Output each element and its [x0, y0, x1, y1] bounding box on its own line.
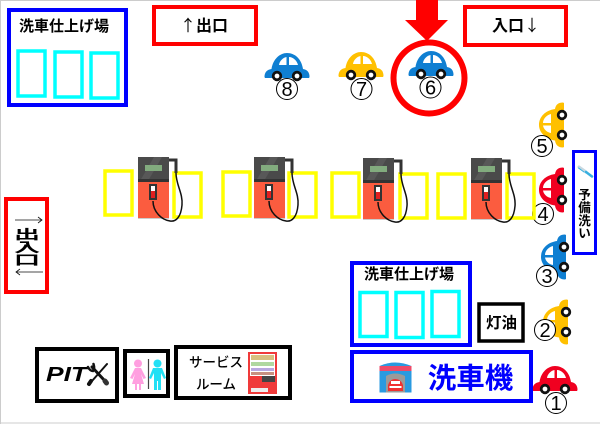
car 3 — [536, 234, 568, 288]
sign: entrance: 入口↓ — [492, 12, 540, 36]
sign: exit left: 入 — [14, 241, 41, 255]
car 6 — [408, 51, 454, 100]
panel: pit: PIT — [46, 364, 89, 386]
icon: woman — [130, 360, 146, 390]
car 2: 2 — [539, 320, 551, 342]
fuel pump 3 — [363, 158, 407, 222]
car 1 — [532, 366, 578, 415]
highlight circle — [394, 42, 464, 114]
finishing bays — [360, 292, 459, 338]
car 3: 3 — [541, 266, 553, 288]
pre-wash label: い — [578, 226, 591, 240]
heading: finishing area: 洗車仕上げ場 — [364, 265, 454, 283]
pre-wash label — [578, 188, 591, 240]
arrow: red down arrow — [405, 0, 448, 41]
car wash label: 洗車機 — [428, 363, 514, 395]
fuel lanes — [105, 171, 534, 218]
car 1: 1 — [550, 393, 562, 415]
finishing bays — [18, 51, 118, 98]
panel: kerosene — [479, 304, 523, 341]
car 8: 8 — [281, 79, 293, 101]
fuel pump 1 — [138, 157, 182, 221]
panel: restroom — [125, 351, 168, 396]
car 5: 5 — [536, 136, 548, 158]
panel: car wash machine — [352, 352, 531, 401]
pre-wash label: 備 — [578, 200, 591, 215]
car 7: 7 — [356, 79, 367, 101]
sign: exit top — [154, 7, 256, 44]
car 7 — [338, 52, 384, 101]
car 4: 4 — [537, 204, 549, 226]
sign: exit left — [6, 199, 47, 292]
car 6: 6 — [425, 78, 436, 100]
car 4 — [532, 168, 566, 226]
sign: entrance — [465, 7, 566, 45]
car 8 — [264, 53, 310, 101]
panel: service room — [176, 347, 290, 398]
pre-wash label: 洗 — [578, 213, 591, 228]
heading: finishing area: 洗車仕上げ場 — [19, 17, 109, 35]
panel: pit — [37, 349, 117, 401]
sign: exit left: 口 — [14, 253, 40, 268]
icon: car wash building — [380, 362, 412, 392]
panel: car finishing area top left — [9, 10, 126, 105]
car 2 — [534, 300, 570, 344]
icon: man — [149, 360, 166, 390]
car 5 — [532, 102, 566, 158]
fuel pump 4 — [471, 158, 515, 222]
panel: kerosene: 灯油 — [486, 314, 517, 332]
panel: service room: ルーム — [196, 377, 236, 392]
icon: brush — [578, 167, 592, 176]
pre-wash label: 予 — [578, 188, 591, 202]
sign: exit left: 出 — [14, 228, 40, 242]
fuel pump 2 — [254, 157, 298, 221]
icon: vending machine — [248, 352, 277, 394]
panel: pre-wash — [574, 152, 596, 254]
panel: car finishing area lower — [352, 263, 470, 345]
icon: tools — [88, 364, 107, 384]
sign: exit top: ↑出口 — [180, 12, 228, 36]
panel: service room: サービス — [189, 355, 243, 370]
